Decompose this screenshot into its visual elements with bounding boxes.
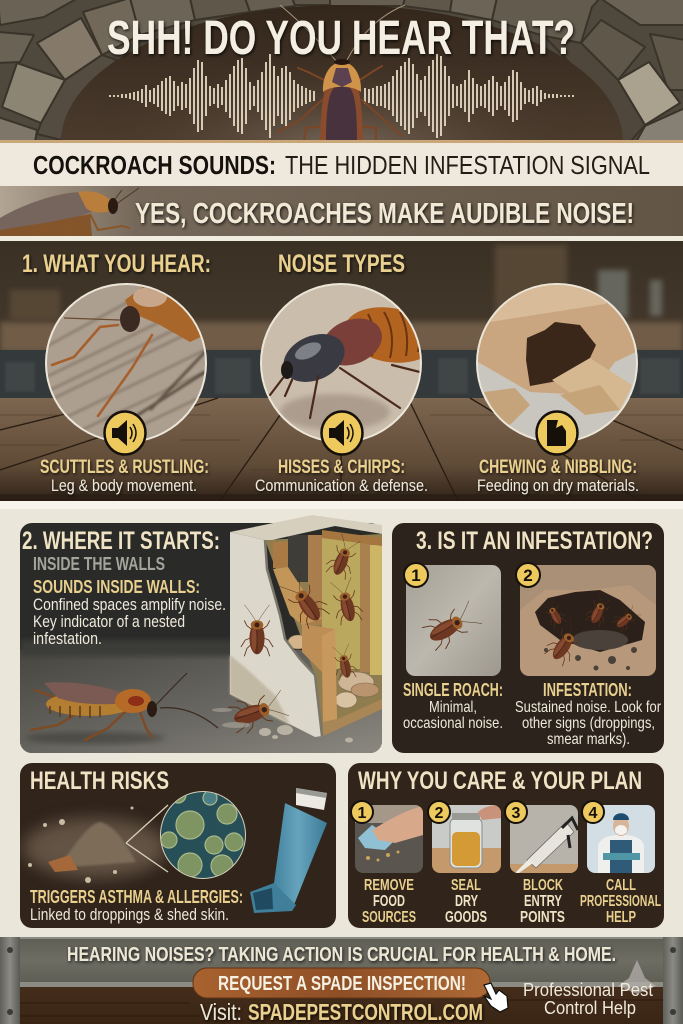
section 1: what you hear (0, 241, 683, 501)
step captions: GOODS (445, 909, 487, 926)
caption: Linked to droppings & shed skin. (30, 905, 229, 924)
number badges: 3 (512, 805, 521, 822)
subtitle band (0, 140, 683, 186)
illustration: magnified allergens (160, 787, 246, 880)
captions: INFESTATION: (543, 680, 632, 700)
wall stones (0, 0, 683, 142)
panel: health risks (20, 763, 336, 928)
icon: cockroach side view (0, 188, 139, 236)
step captions: POINTS (520, 909, 565, 926)
button (193, 968, 490, 998)
panel: where it starts (20, 515, 382, 753)
kitchen background (0, 241, 683, 402)
cockroach on floor by the wall (227, 687, 290, 736)
arch stones (2, 0, 680, 142)
cockroach top view (278, 5, 405, 142)
number badges: 1 (358, 805, 367, 822)
steel posts with rivets (0, 937, 683, 1024)
noise type captions: Leg & body movement. (51, 476, 197, 495)
heading: NOISE TYPES (278, 250, 405, 278)
professional help note: Professional Pest (523, 980, 653, 1000)
captions: smear marks). (547, 731, 630, 748)
number badge 2 (516, 563, 540, 587)
step captions: REMOVE (364, 877, 414, 894)
circle photo: chewed cardboard (476, 283, 638, 440)
noise type captions (40, 457, 639, 495)
icon: spade star (618, 960, 656, 994)
noise type captions: HISSES & CHIRPS: (278, 457, 405, 478)
wood floor (0, 398, 683, 501)
captions: occasional noise. (403, 715, 503, 732)
circle photo: scuttling roach (40, 280, 210, 445)
number badges: 2 (435, 805, 444, 822)
panel text: infestation. (33, 629, 102, 648)
subtitle band: COCKROACH SOUNDS: (33, 150, 276, 180)
number badge 1 (404, 563, 428, 587)
icon: speaker (104, 412, 146, 454)
step captions: CALL (606, 877, 636, 894)
step captions: SEAL (451, 877, 481, 894)
step captions: DRY (455, 893, 478, 910)
panel text: Key indicator of a nested (33, 612, 185, 631)
panel text: INSIDE THE WALLS (33, 554, 165, 574)
number badge 2: 2 (523, 566, 533, 585)
header: stone arch with waveform and cockroach (0, 0, 683, 140)
icon: inhaler (250, 788, 327, 913)
panel text: 2. WHERE IT STARTS: (22, 527, 220, 555)
debris (212, 708, 353, 742)
panel text: SOUNDS INSIDE WALLS: (33, 577, 200, 597)
circle photo: hissing roach (260, 283, 422, 440)
illustration: cut-away wall (230, 515, 382, 737)
noise type captions: Feeding on dry materials. (477, 476, 639, 495)
heading (22, 250, 405, 278)
cockroaches on the wall (241, 532, 365, 681)
captions: Minimal, (429, 699, 477, 716)
illustration: dust pile (23, 805, 168, 883)
captions: SINGLE ROACH: (403, 680, 503, 700)
large cockroach on the floor (25, 673, 218, 744)
panel text: Confined spaces amplify noise. (33, 595, 226, 614)
footer: call to action (0, 937, 683, 1024)
captions (403, 680, 662, 748)
photo: single roach (406, 565, 501, 676)
step captions: BLOCK (523, 877, 563, 894)
banner: yes, cockroaches make audible noise (0, 186, 683, 236)
noise type captions: Communication & defense. (255, 476, 428, 495)
caption: TRIGGERS ASTHMA & ALLERGIES: (30, 887, 243, 907)
website (200, 999, 483, 1024)
icon: speaker (322, 412, 362, 454)
waveform (110, 54, 573, 138)
panel text (22, 527, 226, 648)
icon: chewed box (536, 412, 578, 454)
professional help note (523, 980, 653, 1018)
photo: professional technician (587, 805, 655, 873)
caption (30, 887, 243, 924)
noise type captions: SCUTTLES & RUSTLING: (40, 457, 209, 478)
professional help note: Control Help (544, 998, 636, 1018)
step captions: HELP (606, 909, 636, 926)
step captions: ENTRY (524, 893, 562, 910)
heading: 1. WHAT YOU HEAR: (22, 250, 211, 278)
button: REQUEST A SPADE INSPECTION! (218, 973, 466, 995)
icon: pointing hand cursor (484, 983, 508, 1012)
panel: is it an infestation (392, 523, 664, 753)
panel: health risks: HEALTH RISKS (30, 767, 169, 795)
arch opening (61, 5, 623, 142)
photo: caulk gun (510, 805, 578, 873)
step captions (362, 877, 661, 926)
photo: infestation (520, 565, 656, 676)
number badges (351, 801, 604, 823)
step captions: SOURCES (362, 909, 416, 926)
panel: why you care and your plan (348, 763, 664, 928)
captions: other signs (droppings, (522, 715, 655, 732)
number badges: 4 (589, 805, 598, 822)
step captions: FOOD (373, 893, 405, 910)
number badge 1: 1 (411, 566, 421, 585)
photo: sealed jar (432, 805, 501, 873)
photo: wiping counter (355, 805, 423, 873)
